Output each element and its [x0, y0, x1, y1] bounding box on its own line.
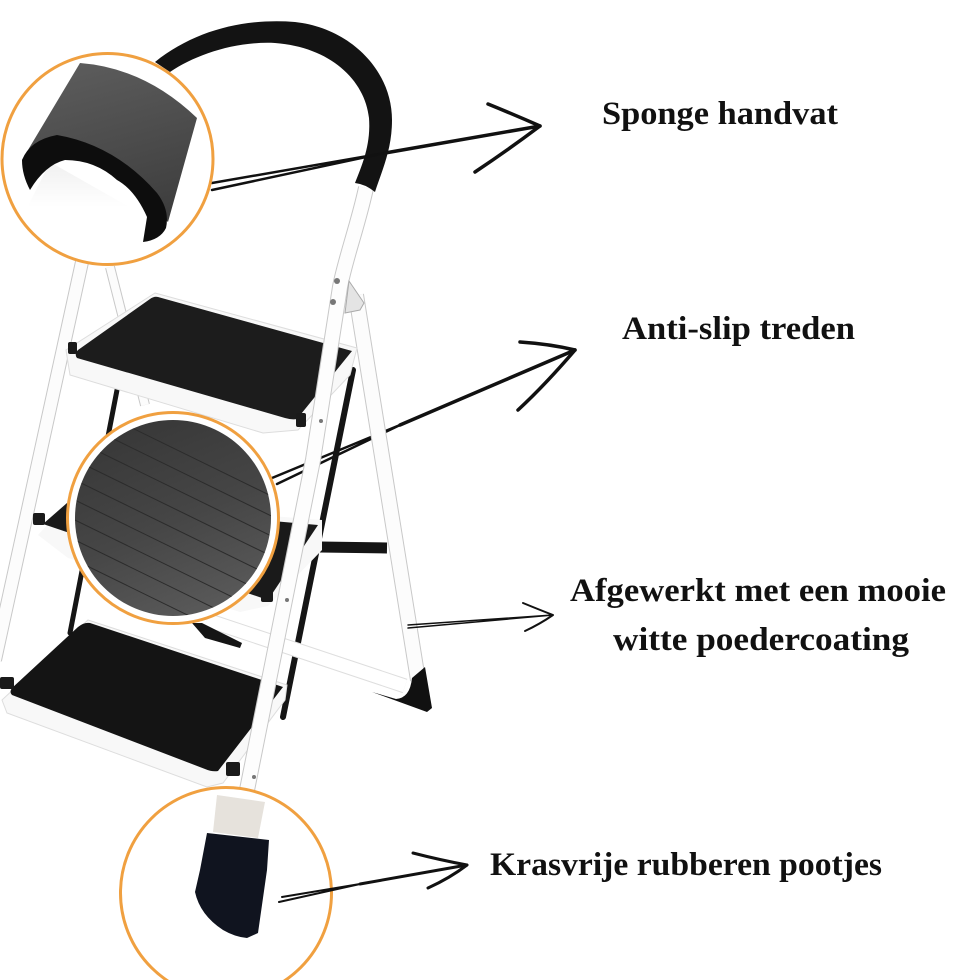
callout circle: tread detail [66, 411, 280, 625]
label: powder coating: Afgewerkt met een mooie [570, 573, 946, 609]
label: sponge handle: Sponge handvat [602, 96, 838, 132]
foam black rim [22, 135, 167, 242]
label: rubber feet: Krasvrije rubberen pootjes [490, 847, 882, 883]
label: powder coating [570, 573, 946, 658]
white tube [213, 795, 265, 838]
step: bottom [2, 620, 287, 787]
front rail [247, 188, 366, 790]
tread surface [75, 420, 271, 616]
rubber foot [195, 833, 269, 938]
step: top [66, 293, 357, 433]
tread grooves [75, 428, 271, 616]
hinge plate [345, 281, 364, 313]
foam sleeve [22, 63, 197, 222]
label: powder coating: witte poedercoating [613, 622, 910, 658]
arrow: sponge handle [212, 104, 540, 190]
secondary left leg [110, 267, 145, 405]
arrow: rubber feet [279, 853, 467, 902]
foam handle [155, 21, 392, 192]
base bar and feet [192, 620, 432, 712]
left rail [0, 262, 82, 660]
step pegs [0, 342, 306, 776]
label: anti-slip treads: Anti-slip treden [622, 311, 855, 347]
ladder [0, 21, 432, 790]
rear braces [70, 370, 387, 717]
white tube [25, 162, 147, 253]
rear leg [356, 295, 418, 680]
callout circle: rubber foot detail [120, 788, 332, 980]
rail bolts [252, 278, 340, 779]
arrow: powder coating [408, 603, 553, 631]
arrow: anti-slip treads [272, 342, 575, 484]
step: middle [38, 500, 322, 612]
callout circle: sponge handle detail [2, 54, 213, 264]
